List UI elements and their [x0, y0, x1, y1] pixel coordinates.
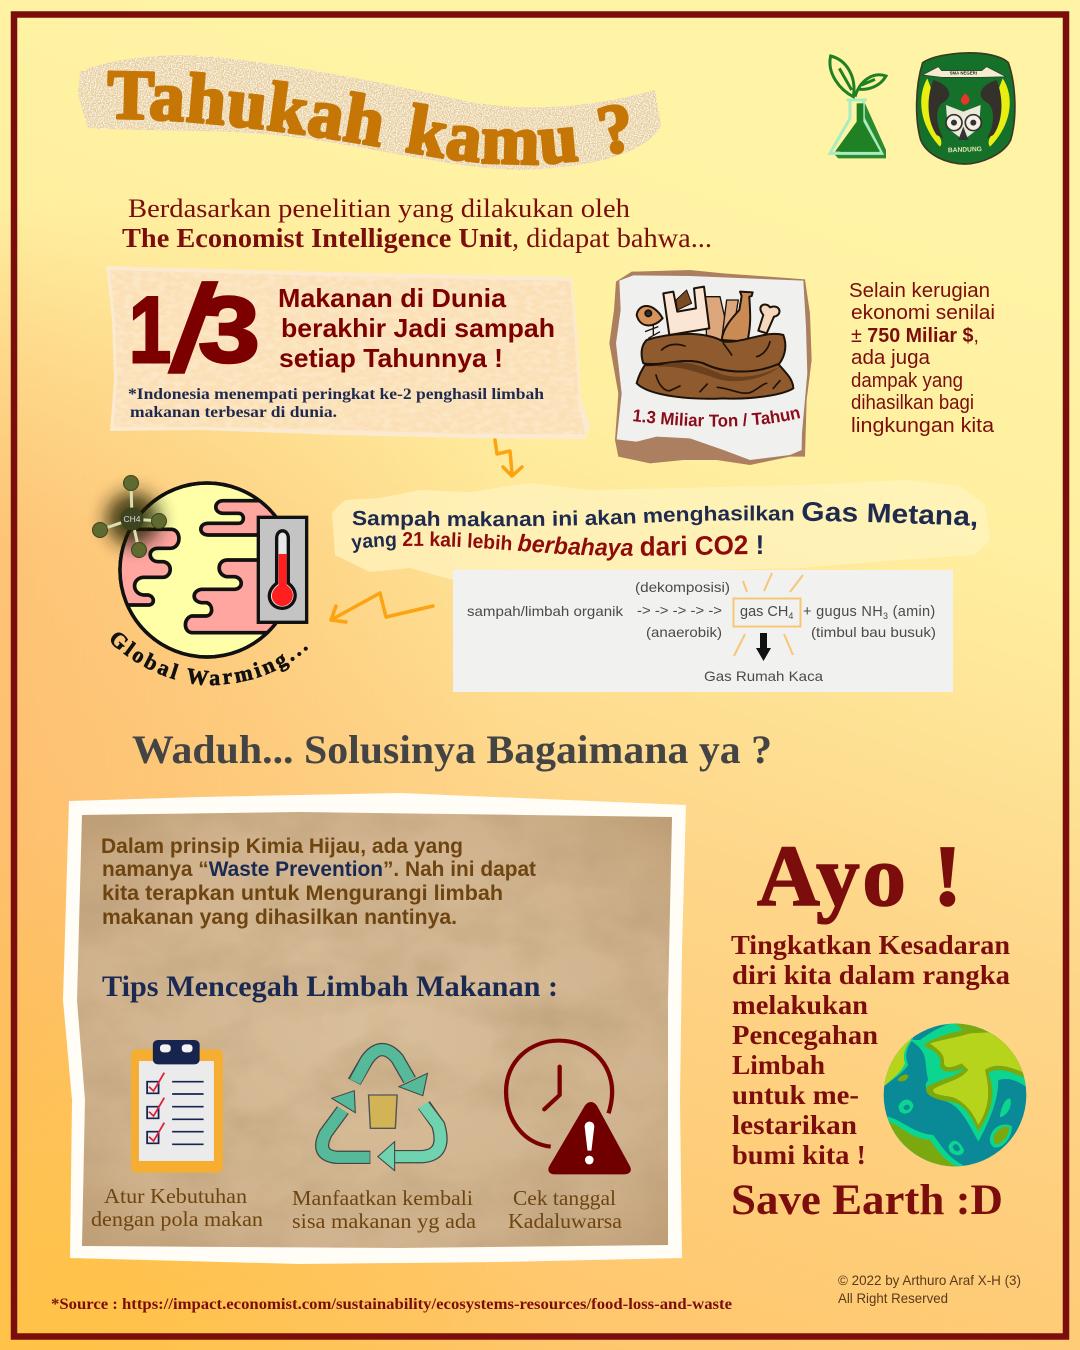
big fraction [129, 261, 260, 397]
panel: methane callout [332, 480, 990, 580]
tip labels: Kadaluwarsa [508, 1209, 623, 1233]
diagram: methane reaction: Gas Rumah Kaca [704, 669, 823, 684]
intro paragraph: Dalam prinsip Kimia Hijau, ada yang [101, 835, 463, 858]
cardboard back [609, 270, 812, 465]
side text: ada juga [851, 347, 931, 369]
curved caption: Global Warming... [110, 632, 308, 686]
icon: school emblem: BANDUNG [948, 146, 982, 154]
parchment [77, 812, 672, 1248]
heading: solution: Waduh... Solusinya Bagaimana ya ? [132, 727, 772, 772]
diagram: methane reaction: (anaerobik) [646, 625, 722, 640]
white torn frame [63, 793, 686, 1264]
arrow: to greenhouse gas [756, 633, 771, 661]
diagram: methane reaction: (dekomposisi) [635, 580, 730, 595]
arrow: lightning left [331, 593, 433, 622]
big fraction: 3 [198, 277, 260, 382]
icon: school emblem: SMA NEGERI [950, 71, 977, 76]
pale torn banner [332, 480, 990, 580]
footnote: makanan terbesar di dunia. [130, 404, 337, 421]
diagram: methane reaction [453, 570, 953, 692]
call to action text: melakukan [732, 990, 868, 1020]
call to action text: Limbah [732, 1050, 825, 1080]
torn white paper [616, 275, 807, 460]
tip labels: dengan pola makan [91, 1207, 264, 1231]
callout line one: Sampah makanan ini akan menghasilkan Gas Metana, [352, 502, 976, 530]
icon: global warming globe [92, 475, 308, 686]
side text: ± 750 Miliar $, [851, 325, 979, 347]
title text: Tahukah kamu ? [107, 70, 628, 166]
side text: dampak yang [851, 370, 963, 392]
methane glow [106, 492, 160, 546]
side text: dihasilkan bagi [851, 392, 974, 414]
tip labels: Atur Kebutuhan [104, 1184, 248, 1208]
call to action text: Pencegahan [732, 1020, 878, 1050]
call to action text: bumi kita ! [732, 1140, 866, 1170]
icon: school emblem [917, 53, 1015, 164]
panel: one third fact [106, 261, 590, 439]
diagram: methane reaction: (amin) [888, 604, 936, 620]
sack contents [637, 287, 793, 399]
tips heading: Tips Mencegah Limbah Makanan : [102, 970, 558, 1003]
diagram: methane reaction: (timbul bau busuk) [811, 625, 936, 640]
card caption: 1.3 Miliar Ton / Tahun [633, 409, 800, 427]
tip labels: Manfaatkan kembali [292, 1186, 473, 1210]
icon: green chemistry flask [830, 56, 886, 158]
diagram: methane reaction: 3 [883, 611, 888, 621]
intro paragraph: namanya “Waste Prevention”. Nah ini dapat [102, 858, 536, 881]
call to action text [731, 930, 1011, 1170]
tip labels: Cek tanggal [513, 1186, 616, 1210]
save earth slogan: Save Earth :D [731, 1177, 1003, 1224]
call to action text: untuk me- [732, 1080, 859, 1110]
icon: earth [880, 1020, 1030, 1170]
diagram: methane reaction: sampah/limbah organik [467, 604, 623, 619]
call to action text: Tingkatkan Kesadaran [731, 930, 1010, 960]
tip labels: sisa makanan yg ada [292, 1209, 477, 1233]
diagram: methane reaction: 4 [788, 611, 793, 621]
panel: waste prevention [63, 793, 686, 1264]
intro paragraph: kita terapkan untuk Mengurangi limbah [102, 882, 503, 905]
source note: *Source : https://impact.economist.com/sustainability/ecosystems-resources/food-loss-and-waste [51, 1296, 732, 1313]
methane molecule: CH4 [123, 514, 141, 524]
big fraction: 1 [129, 277, 171, 382]
headline [278, 283, 555, 373]
heading: ayo: Ayo ! [757, 827, 962, 924]
tip labels [91, 1184, 623, 1233]
arrow: lightning down [495, 440, 522, 476]
headline: Makanan di Dunia [278, 283, 507, 313]
intro text: The Economist Intelligence Unit , didapat bahwa... [122, 223, 712, 253]
footnote [128, 386, 544, 421]
icon: clipboard [131, 1040, 223, 1173]
highlight box and rays [734, 573, 803, 656]
intro paragraph: makanan yang dihasilkan nantinya. [102, 906, 457, 929]
side text: ekonomi senilai [851, 302, 995, 324]
intro text: Berdasarkan penelitian yang dilakukan oleh [128, 194, 630, 223]
call to action text: lestarikan [732, 1110, 857, 1140]
headline: berakhir Jadi sampah [281, 313, 555, 343]
copyright: All Right Reserved [838, 1290, 948, 1306]
intro paragraph [101, 835, 536, 929]
diagram: methane reaction: gas CH [740, 604, 788, 620]
side text: Selain kerugian [849, 280, 990, 302]
methane molecule [92, 476, 166, 558]
headline: setiap Tahunnya ! [279, 343, 503, 373]
side text: lingkungan kita [851, 415, 995, 437]
intro text [122, 194, 712, 253]
banner texture [78, 55, 661, 170]
icon: recycle [322, 1050, 441, 1171]
callout line two: yang 21 kali lebih berbahaya dari CO2 ! [351, 531, 762, 561]
footnote: *Indonesia menempati peringkat ke-2 penghasil limbah [128, 386, 544, 403]
icon: expiry clock warning [506, 1041, 631, 1174]
torn paper [106, 266, 590, 439]
copyright: © 2022 by Arthuro Araf X-H (3) [838, 1272, 1021, 1288]
thermometer [258, 517, 307, 622]
call to action text: diri kita dalam rangka [732, 960, 1011, 990]
card: waste sack [609, 270, 812, 465]
title banner [78, 55, 661, 170]
copyright [838, 1272, 1021, 1306]
big fraction: / [170, 261, 216, 397]
diagram: methane reaction: -> -> -> -> -> [637, 603, 722, 618]
diagram: methane reaction: + gugus NH [803, 604, 883, 620]
side text [849, 280, 995, 437]
